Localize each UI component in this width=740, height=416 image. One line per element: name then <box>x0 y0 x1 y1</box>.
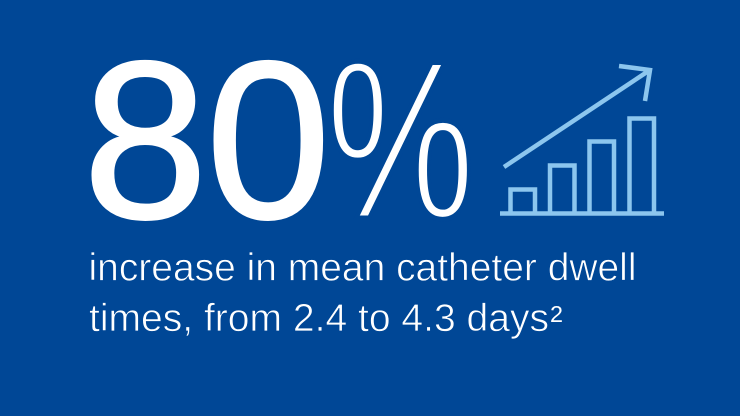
line 1: increase in mean catheter dwell <box>88 246 636 290</box>
footnote superscript: 2 <box>550 301 563 327</box>
bar 1 <box>510 190 535 213</box>
line 2: times, from 2.4 to 4.3 days <box>89 297 549 340</box>
bar 3 <box>590 142 614 213</box>
arrow <box>504 66 650 167</box>
bar 4 <box>630 118 654 213</box>
percent sign: % <box>326 15 475 267</box>
body text <box>88 246 636 340</box>
number: 80: 80 <box>83 16 331 266</box>
icon: rising bar chart with arrow <box>500 66 664 214</box>
baseline <box>500 211 664 216</box>
bar 2 <box>550 166 574 213</box>
heading: 80 percent <box>83 15 475 267</box>
